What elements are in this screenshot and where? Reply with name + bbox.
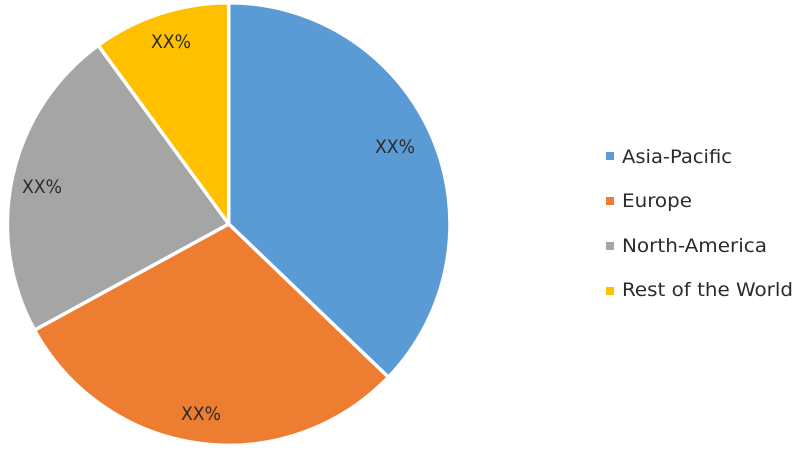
legend item: North-America: North-America bbox=[622, 235, 767, 257]
label: Rest of the World value: XX% bbox=[151, 31, 191, 53]
slice: North-America bbox=[7, 45, 229, 330]
slice: Rest of the World bbox=[98, 3, 229, 224]
legend item: Asia-Pacific: Asia-Pacific bbox=[622, 146, 732, 168]
data labels bbox=[22, 31, 415, 425]
slice: Europe bbox=[34, 224, 388, 445]
slice: Asia-Pacific bbox=[229, 3, 450, 377]
pie chart bbox=[7, 3, 450, 445]
legend bbox=[606, 146, 793, 301]
label: North-America value: XX% bbox=[22, 176, 62, 198]
label: Europe value: XX% bbox=[181, 403, 221, 425]
legend item: Rest of the World: Rest of the World bbox=[622, 279, 793, 301]
label: Asia-Pacific value: XX% bbox=[375, 136, 415, 158]
legend item: Europe: Europe bbox=[622, 190, 692, 212]
